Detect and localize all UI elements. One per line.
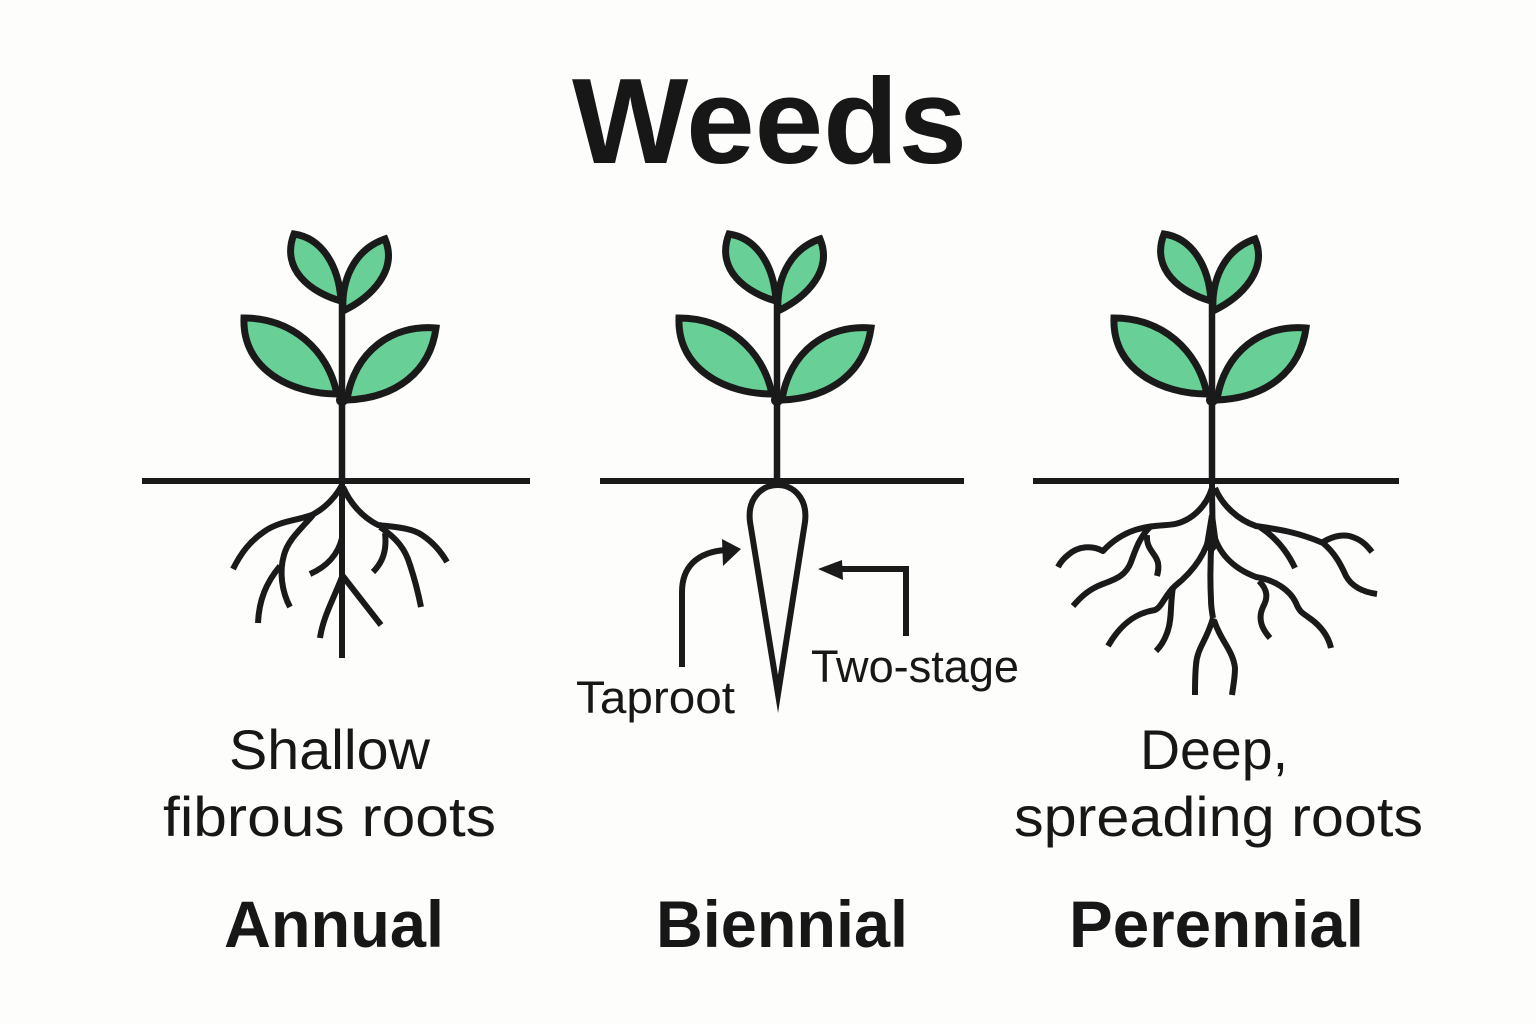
- panel: perennial: [1014, 234, 1423, 961]
- annual root description: [163, 718, 496, 848]
- arrow: two-stage label to root: [818, 560, 906, 636]
- panel: biennial: [576, 234, 1019, 961]
- taproot label: Taproot: [576, 672, 736, 723]
- perennial root description: spreading roots: [1014, 785, 1423, 848]
- biennial label: Biennial: [656, 887, 908, 961]
- biennial ground line: [600, 478, 964, 484]
- perennial root description: Deep,: [1140, 718, 1288, 781]
- panel: annual: [142, 234, 530, 961]
- two-stage label: Two-stage: [811, 641, 1019, 692]
- annual fibrous roots: [233, 483, 447, 658]
- annual ground line: [142, 478, 530, 484]
- annual label: Annual: [224, 887, 444, 961]
- icon: taproot: [750, 485, 805, 694]
- arrow: taproot label to root: [682, 539, 741, 667]
- perennial ground line: [1033, 478, 1399, 484]
- perennial label: Perennial: [1069, 887, 1364, 961]
- perennial spreading roots: [1058, 483, 1377, 695]
- perennial root description: [1014, 718, 1423, 848]
- icon: perennial plant shoot: [1114, 234, 1306, 482]
- annual root description: fibrous roots: [163, 785, 496, 848]
- title: Weeds: [572, 53, 967, 189]
- annual root description: Shallow: [229, 718, 431, 781]
- icon: biennial plant shoot: [679, 234, 871, 482]
- icon: annual plant shoot: [244, 234, 436, 482]
